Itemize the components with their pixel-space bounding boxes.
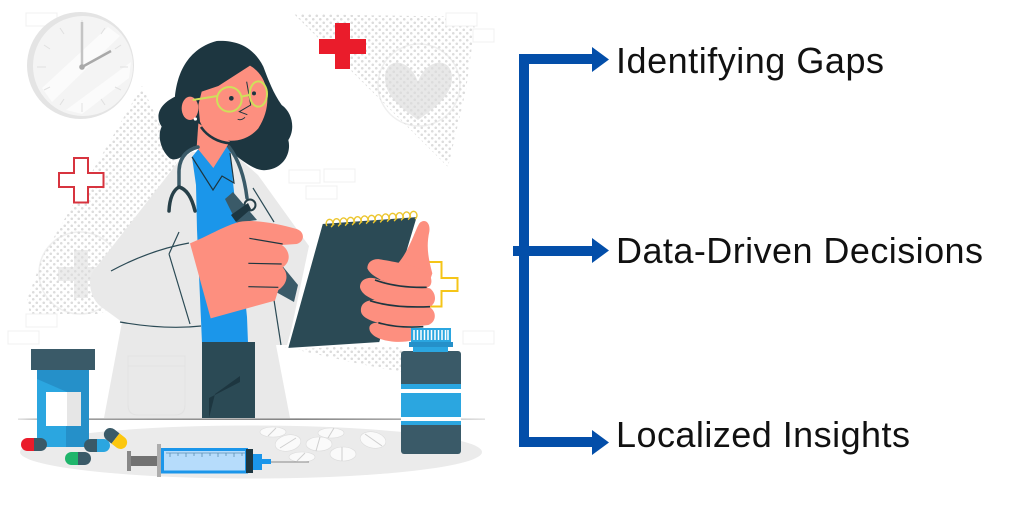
notebook spiral bbox=[326, 211, 417, 227]
pill bottle bbox=[31, 349, 95, 447]
table top bbox=[20, 426, 482, 478]
holding hand bbox=[360, 221, 435, 342]
arrow to Data-Driven Decisions bbox=[513, 238, 609, 263]
icon: faint medical cross bbox=[39, 232, 121, 314]
shirt collar bbox=[192, 153, 234, 190]
doctor trousers bbox=[202, 342, 255, 418]
capsules bbox=[21, 425, 130, 465]
dotted background shapes bbox=[27, 14, 476, 372]
icon: solid red cross bbox=[319, 23, 366, 69]
label: Identifying Gaps: Identifying Gaps bbox=[616, 40, 884, 81]
pen bbox=[225, 192, 298, 302]
glasses bbox=[193, 81, 267, 112]
doctor hair bbox=[158, 41, 292, 170]
arrow to Identifying Gaps bbox=[519, 47, 609, 455]
notebook bbox=[287, 211, 418, 349]
tablets bbox=[260, 427, 387, 462]
table edge line bbox=[18, 418, 485, 420]
doctor face and neck bbox=[182, 66, 267, 168]
icon: yellow outline cross bbox=[412, 262, 458, 306]
icon: red outline cross bbox=[59, 158, 104, 202]
coat pocket bbox=[128, 356, 185, 415]
doctor shirt bbox=[192, 147, 248, 343]
stethoscope bbox=[169, 147, 256, 211]
bracket arrows bbox=[513, 47, 609, 455]
coat sleeve lines bbox=[111, 188, 281, 345]
icon: wall clock bbox=[27, 12, 134, 119]
writing hand bbox=[190, 221, 303, 318]
medicine bottle bbox=[401, 328, 461, 454]
icon: faint heart monitor bbox=[378, 44, 460, 126]
illustration: doctor with notebook and medicine bbox=[8, 12, 494, 478]
label: Localized Insights: Localized Insights bbox=[616, 414, 910, 455]
faint note boxes bbox=[8, 13, 494, 344]
label: Data-Driven Decisions: Data-Driven Decisions bbox=[616, 230, 983, 271]
doctor lab coat bbox=[90, 152, 309, 418]
syringe bbox=[127, 444, 309, 477]
